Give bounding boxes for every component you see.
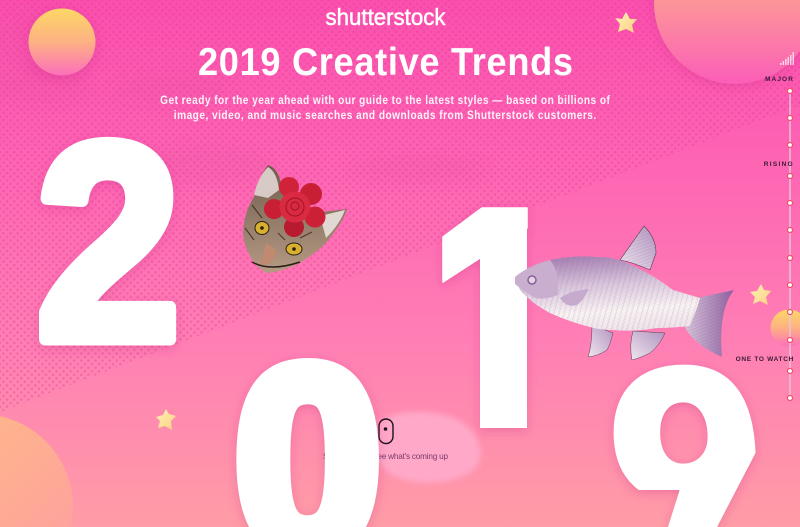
label: major: MAJOR: [765, 76, 794, 83]
signal bars icon: [780, 52, 794, 65]
circle: right small sun: [770, 310, 800, 346]
icon: fish: [515, 226, 734, 360]
circle: top left sun: [28, 8, 96, 76]
logo: shutterstock: [326, 4, 446, 30]
title: 2019 Creative Trends: [198, 40, 573, 83]
label: one to watch: ONE TO WATCH: [736, 356, 794, 363]
roses: [264, 177, 326, 237]
subtitle: Get ready for the year ahead with our guide to the latest styles — based on billions of: [160, 94, 610, 107]
star: right: [750, 284, 771, 305]
subtitle: [160, 94, 610, 122]
icon: cat with roses: [243, 165, 347, 273]
big numeral 1: 1: [388, 157, 597, 492]
circle: top right sun: [654, 0, 800, 84]
mouse icon: [379, 419, 393, 444]
subtitle: image, video, and music searches and downloads from Shutterstock customers.: [174, 109, 596, 122]
timeline: [736, 76, 794, 400]
scroll caption: Scroll down to see what's coming up: [323, 452, 448, 461]
cloud: [376, 412, 480, 483]
star: bottom left: [156, 409, 176, 430]
big numeral 1: [439, 207, 531, 435]
star: top: [615, 12, 637, 33]
big numeral 2: 2: [36, 86, 181, 399]
circle: bottom left sun: [0, 414, 73, 527]
label: rising: RISING: [764, 161, 794, 168]
